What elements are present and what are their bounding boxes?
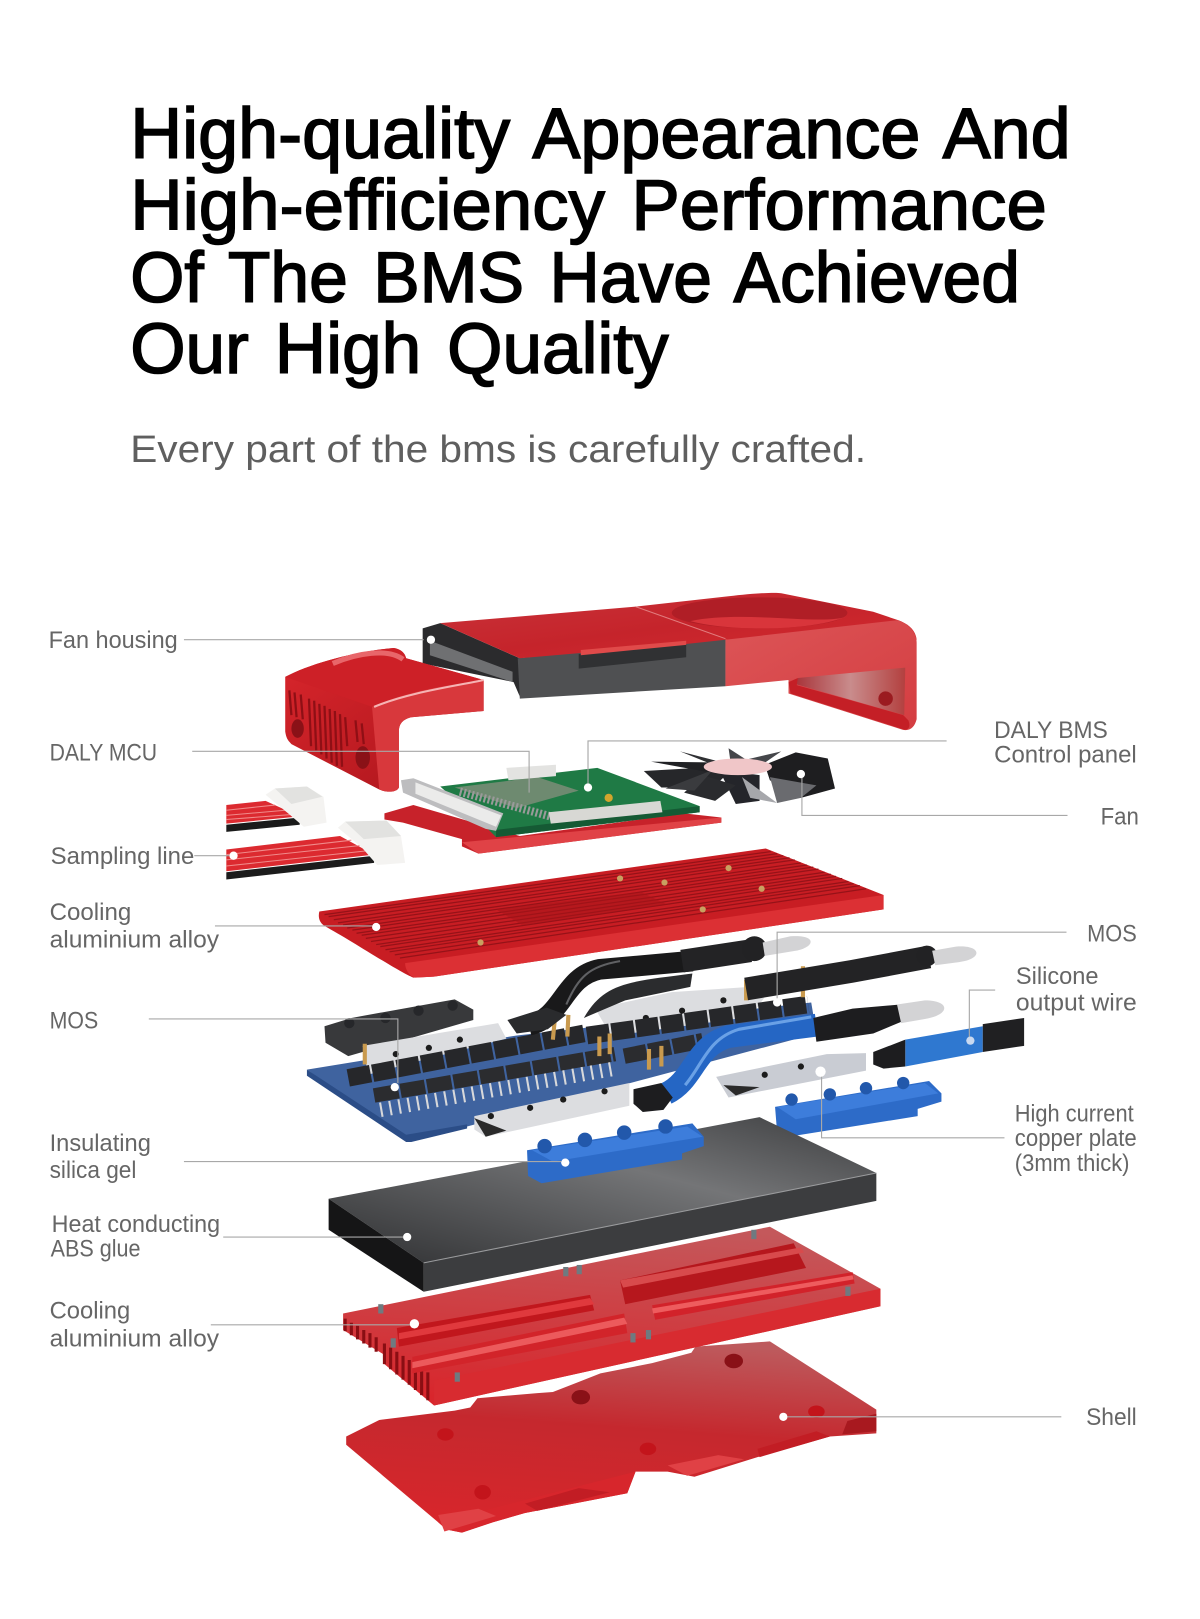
- leader: upper cooling: [215, 923, 380, 931]
- label: High current copper plate: [1015, 1100, 1137, 1177]
- leader: control panel: [584, 741, 947, 792]
- label: DALY BMS Control panel: Control panel: [994, 742, 1137, 769]
- component: fan: [644, 748, 835, 804]
- black wire upper right: [746, 957, 929, 989]
- label: High current copper plate: (3mm thick): [1015, 1150, 1130, 1177]
- leader: fan: [797, 770, 1068, 815]
- component: control board: [384, 765, 721, 854]
- blue wire main: [667, 1025, 816, 1093]
- label: Shell: Shell: [1086, 1404, 1137, 1431]
- label: DALY BMS Control panel: DALY BMS: [994, 717, 1108, 744]
- leader: left MOS: [149, 1019, 399, 1091]
- leader: shell: [779, 1413, 1061, 1421]
- leader: copper plate: [815, 1067, 1004, 1138]
- label: MOS left: MOS: [50, 1007, 98, 1034]
- black insulating block: [324, 999, 473, 1056]
- component: upper cooling aluminium: [319, 848, 884, 978]
- component: blue silica clip left: [527, 1119, 704, 1183]
- label: Fan housing: Fan housing: [49, 627, 178, 654]
- label: DALY BMS Control panel: [994, 717, 1137, 769]
- label: Cooling aluminium alloy (lower): [50, 1298, 220, 1353]
- leader: silicone wire: [966, 990, 995, 1045]
- title: High-efficiency Performance: [130, 165, 1047, 245]
- connector: MCU header: [506, 765, 556, 780]
- component: fan housing: [423, 593, 917, 730]
- label: Cooling aluminium alloy (upper): [50, 899, 220, 954]
- label: High current copper plate: copper plate: [1015, 1125, 1137, 1152]
- label: Heat conducting ABS glue: Heat conducting: [52, 1211, 220, 1238]
- label: Cooling aluminium alloy (upper): Cooling: [50, 899, 131, 926]
- component: left end cap: [285, 648, 484, 792]
- leader: heat conducting: [223, 1233, 411, 1241]
- leader: DALY MCU: [192, 751, 529, 793]
- label: Silicone output wire: [1016, 963, 1137, 1017]
- title: Our High Quality: [130, 309, 669, 389]
- component: sampling lines: [226, 786, 405, 879]
- component: blue silica clip right: [775, 1077, 941, 1137]
- label: High current copper plate: High current: [1015, 1100, 1134, 1127]
- leader: fan housing: [184, 636, 435, 644]
- leader: sampling line: [194, 852, 238, 860]
- label: Silicone output wire: output wire: [1016, 990, 1137, 1017]
- label: Cooling aluminium alloy (lower): aluminium alloy: [50, 1326, 220, 1353]
- title: [130, 94, 1071, 389]
- leader: right MOS: [773, 932, 1066, 1007]
- MOS rows: [348, 1033, 584, 1078]
- component: heat conducting ABS plate: [329, 1117, 876, 1292]
- label: Heat conducting ABS glue: ABS glue: [51, 1236, 141, 1263]
- silicone output wire: [873, 1018, 1024, 1069]
- label: Insulating silica gel: silica gel: [50, 1157, 136, 1184]
- component: lower cooling aluminium: [343, 1227, 880, 1405]
- title: High-quality Appearance And: [130, 94, 1071, 174]
- label: Heat conducting ABS glue: [51, 1211, 220, 1263]
- label: Insulating silica gel: Insulating: [50, 1130, 151, 1157]
- fan hub: [704, 759, 772, 775]
- label: Insulating silica gel: [50, 1130, 151, 1184]
- leader: insulating gel: [184, 1158, 569, 1167]
- component: MOS power board: [307, 936, 1024, 1142]
- label: MOS right: MOS: [1087, 920, 1137, 947]
- label: Silicone output wire: Silicone: [1016, 963, 1099, 990]
- title: Of The BMS Have Achieved: [130, 238, 1020, 318]
- leader: lower cooling: [211, 1319, 419, 1328]
- label: Fan: Fan: [1101, 804, 1139, 831]
- component: shell: [346, 1341, 876, 1533]
- subtitle: Every part of the bms is carefully crafted.: [130, 428, 866, 471]
- label: Sampling line: Sampling line: [51, 843, 194, 870]
- label: Cooling aluminium alloy (upper): aluminium alloy: [50, 927, 220, 954]
- copper plates: [363, 1023, 506, 1075]
- black wire upper left: [529, 961, 692, 1025]
- label: Cooling aluminium alloy (lower): Cooling: [50, 1298, 130, 1325]
- label: DALY MCU: DALY MCU: [50, 740, 157, 767]
